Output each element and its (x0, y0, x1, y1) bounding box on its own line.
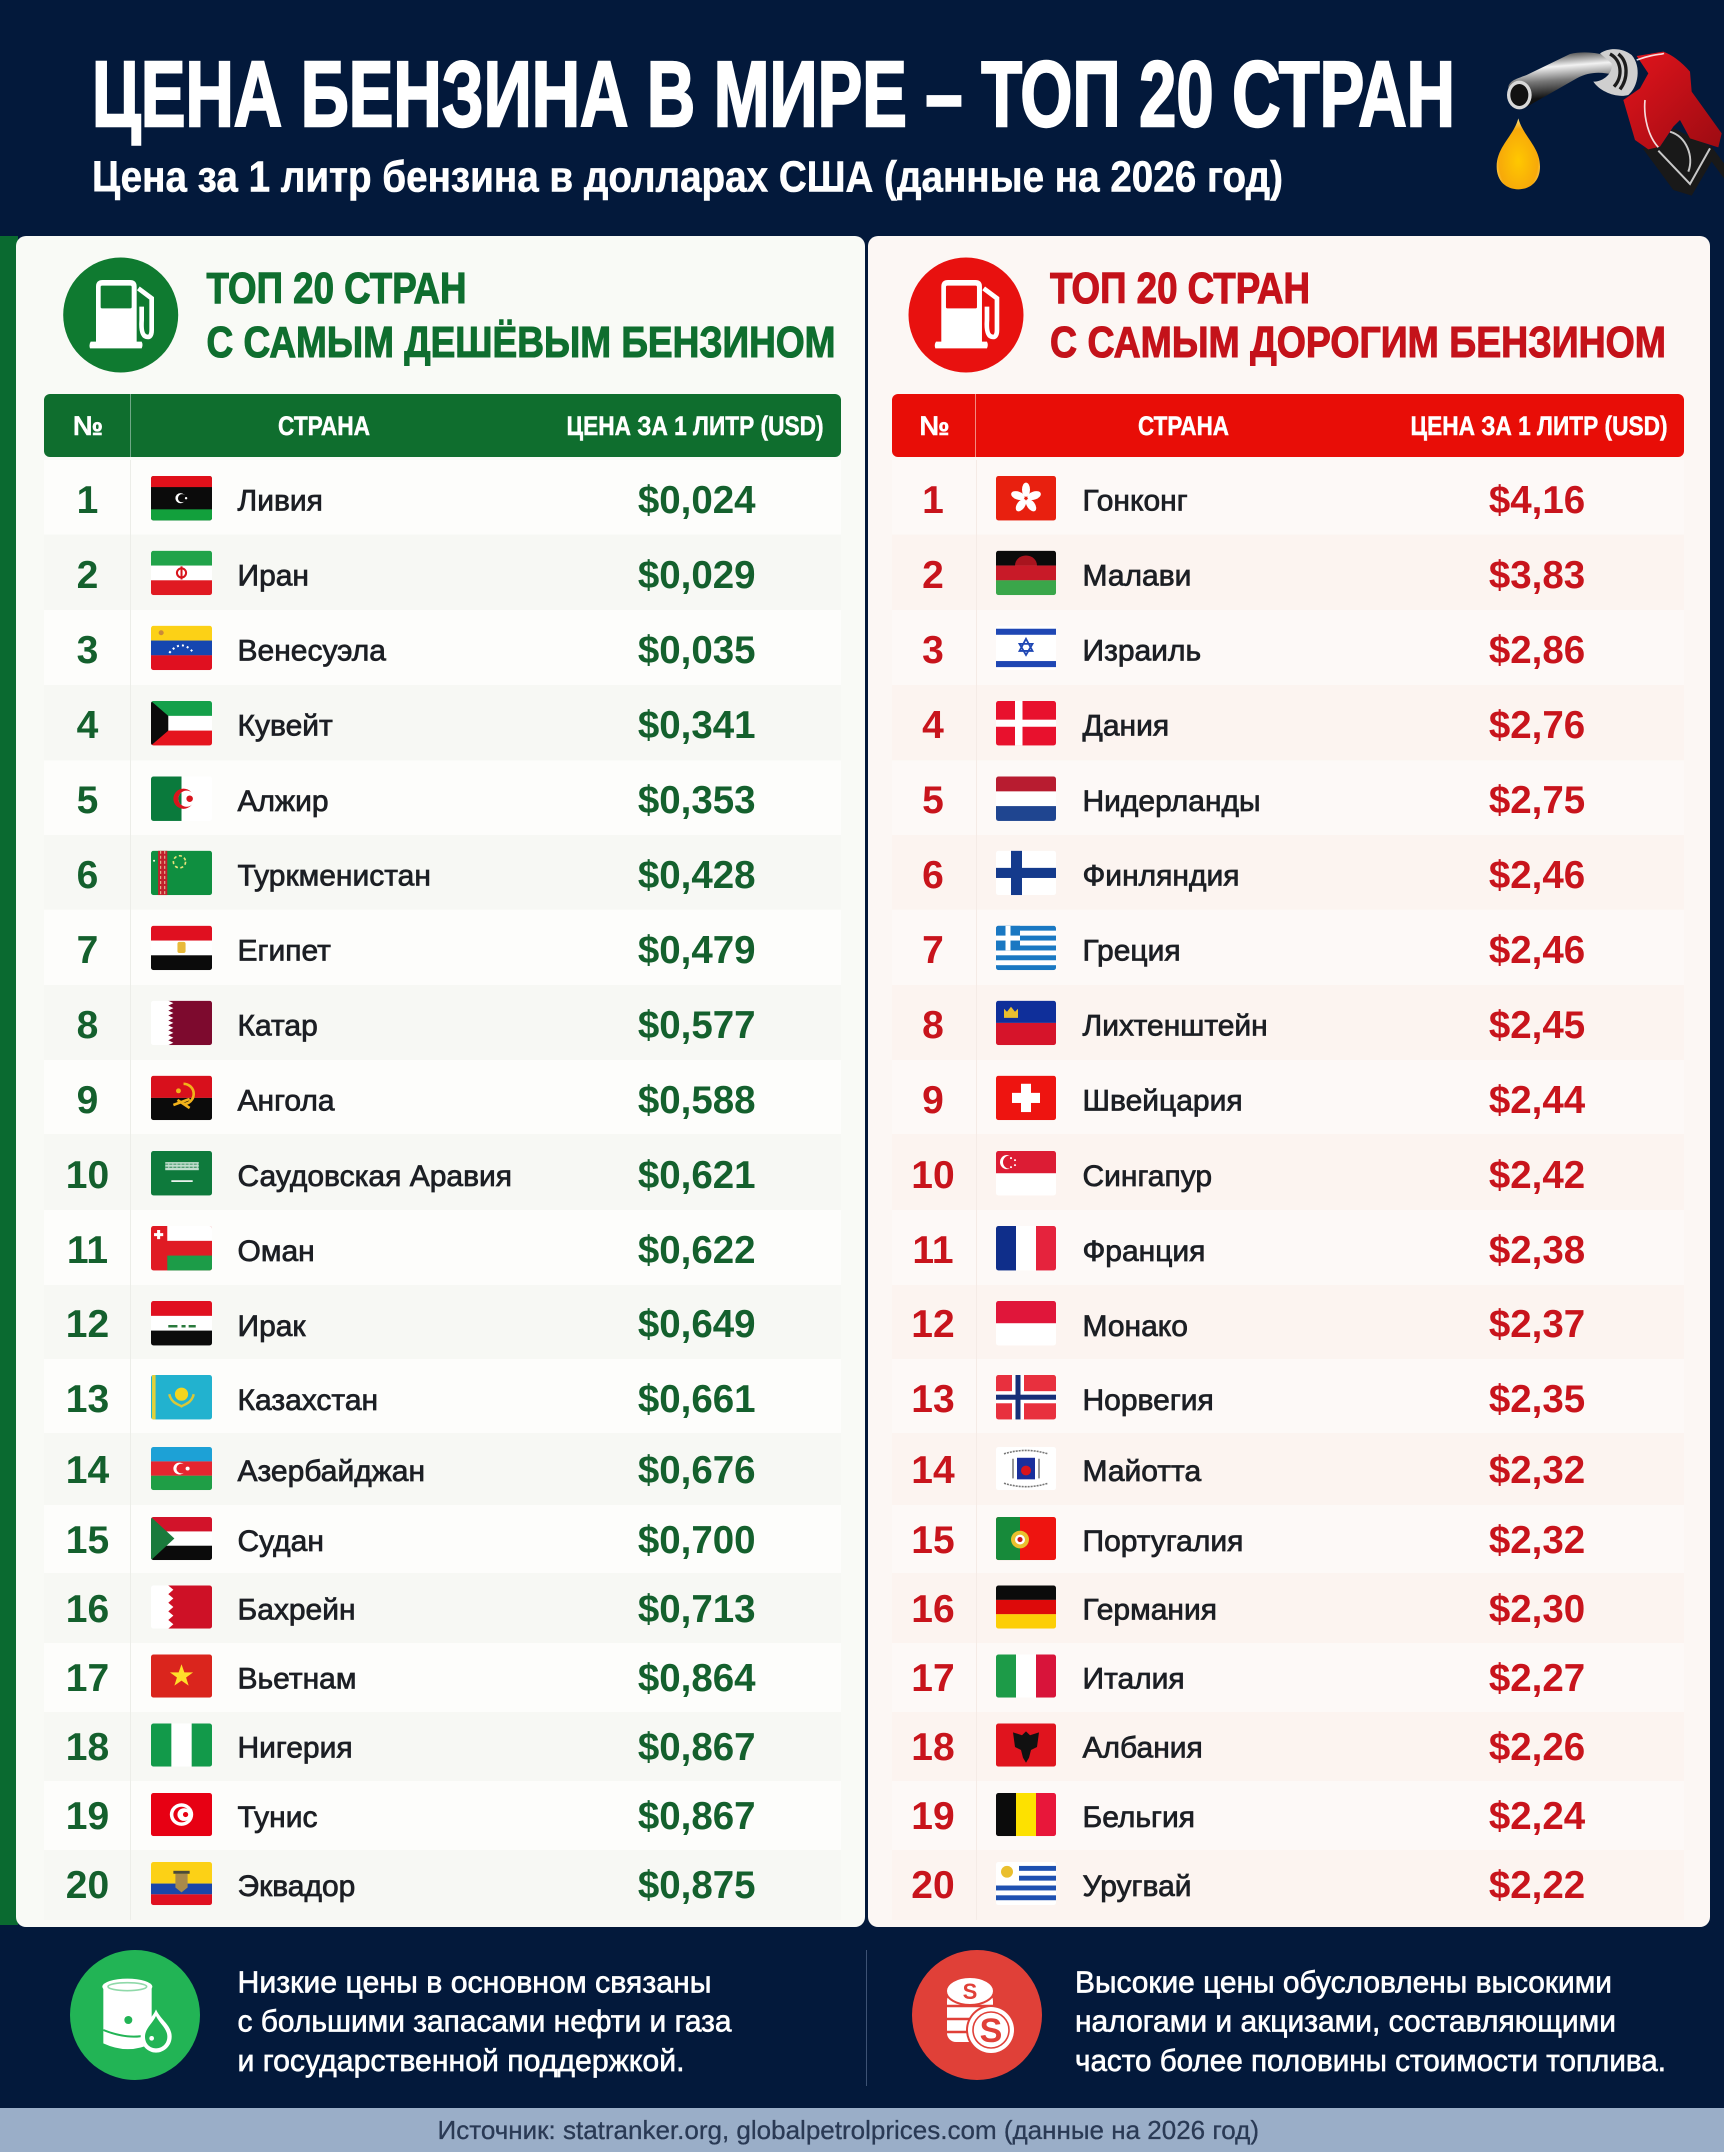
row 4: Дания (1082, 710, 1169, 742)
row 5: 5 (922, 779, 944, 822)
flag: Italy (996, 1654, 1056, 1698)
row 8: 8 (922, 1004, 944, 1047)
table header (892, 394, 1684, 457)
row 16: Германия (1082, 1594, 1217, 1626)
row 14: $0,676 (638, 1449, 756, 1492)
row 13: 13 (911, 1378, 955, 1421)
row 12 (68, 1301, 754, 1346)
flag: Uruguay (996, 1862, 1056, 1905)
note text: и государственной поддержкой. (238, 2043, 684, 2078)
row 5: 5 (77, 779, 98, 822)
row 16 (68, 1586, 754, 1629)
flag: Turkmenistan (151, 851, 212, 895)
row 18: $0,867 (638, 1726, 756, 1769)
row 16: $2,30 (1489, 1588, 1585, 1631)
flag: Iran (151, 551, 212, 595)
source bar (0, 2108, 1724, 2152)
row 20: 20 (911, 1864, 955, 1907)
flag: Germany (996, 1586, 1056, 1629)
icon: oil barrel (70, 1950, 200, 2080)
icon: green fuel pump (63, 258, 178, 372)
row 19: 19 (66, 1795, 109, 1838)
row 15 (892, 1505, 1684, 1573)
row 18: 18 (911, 1726, 955, 1769)
row 15: 15 (66, 1519, 109, 1562)
row 1: 1 (77, 479, 98, 522)
row 4 (77, 701, 754, 746)
flag: Iraq (151, 1301, 212, 1345)
row 14: Майотта (1082, 1455, 1201, 1488)
flag: Angola (151, 1076, 212, 1120)
row 14: 14 (66, 1449, 109, 1492)
row 3: Израиль (1082, 634, 1201, 668)
row 10 (68, 1151, 754, 1196)
flag: Finland (996, 851, 1056, 895)
flag: Nigeria (151, 1724, 212, 1767)
row 19: $2,24 (1489, 1795, 1586, 1838)
row 17: 17 (66, 1657, 109, 1700)
row 8: 8 (77, 1004, 98, 1047)
flag: Qatar (151, 1001, 212, 1045)
note text: Высокие цены обусловлены высокими (1075, 1964, 1612, 2000)
row 4: $2,76 (1489, 704, 1585, 747)
row 14 (68, 1447, 754, 1490)
row 6: 6 (922, 854, 944, 897)
row 12: 12 (66, 1303, 109, 1346)
row 16: 16 (66, 1588, 109, 1631)
row 17: Италия (1082, 1662, 1185, 1696)
flag: Vietnam (151, 1654, 212, 1698)
row 10: $0,621 (638, 1154, 756, 1197)
row 20: Эквадор (238, 1870, 355, 1903)
flag: Oman (151, 1226, 212, 1270)
flag: Tunisia (151, 1793, 212, 1836)
row 14: $2,32 (1489, 1449, 1585, 1492)
table header: № (73, 411, 103, 441)
row 4: $0,341 (638, 704, 756, 747)
row 7 (78, 926, 754, 970)
row 19: $0,867 (638, 1795, 756, 1838)
row 7: $0,479 (638, 929, 756, 972)
flag: Saudi Arabia (151, 1151, 212, 1195)
flag: Albania (996, 1724, 1056, 1767)
row 3 (78, 626, 754, 670)
row 4 (892, 685, 1684, 760)
row 3: 3 (922, 629, 944, 672)
row 12: $0,649 (638, 1303, 756, 1346)
row 1: Гонконг (1082, 484, 1188, 518)
row 12: Монако (1082, 1310, 1188, 1343)
row 3: Венесуэла (238, 634, 386, 668)
row 11: $2,38 (1489, 1229, 1585, 1272)
flag: Greece (996, 926, 1056, 970)
row 14 (892, 1433, 1684, 1505)
panel: cheapest petrol (0, 236, 865, 1927)
row 18 (68, 1724, 754, 1767)
row 9: $0,588 (638, 1079, 756, 1122)
row 8: $2,45 (1489, 1004, 1585, 1047)
flag: Belgium (996, 1793, 1056, 1836)
row 5: Алжир (238, 785, 329, 818)
row 11 (892, 1210, 1684, 1285)
panel heading: С САМЫМ ДЕШЁВЫМ БЕНЗИНОМ (206, 319, 836, 367)
row 15: Португалия (1082, 1525, 1243, 1558)
row 10: 10 (66, 1154, 109, 1197)
flag: Netherlands (996, 776, 1056, 821)
row 9: 9 (77, 1079, 98, 1122)
row 15: $0,700 (638, 1519, 756, 1562)
row 15: Судан (238, 1525, 324, 1558)
row 2: Иран (238, 560, 309, 592)
row 7: 7 (77, 929, 98, 972)
row 13: $2,35 (1489, 1378, 1585, 1421)
row 2: 2 (922, 554, 944, 597)
flag: Singapore (996, 1151, 1056, 1195)
flag: Egypt (151, 926, 212, 970)
row 16: Бахрейн (238, 1594, 356, 1626)
row 12: $2,37 (1489, 1303, 1585, 1346)
row 6: Туркменистан (238, 860, 431, 892)
icon: coins (912, 1950, 1042, 2080)
row 9: Ангола (238, 1084, 335, 1118)
panel heading (206, 265, 836, 367)
row 2: Малави (1082, 560, 1191, 592)
flag: Mayotte (996, 1447, 1056, 1490)
row 14: Азербайджан (238, 1455, 425, 1488)
row 10: 10 (911, 1154, 955, 1197)
row 5 (78, 776, 754, 821)
row 1: 1 (922, 479, 944, 522)
note text (238, 1964, 732, 2078)
row 8: $0,577 (638, 1004, 756, 1047)
row 1 (892, 460, 1684, 535)
row 17: $0,864 (638, 1657, 756, 1700)
row 13: $0,661 (638, 1378, 756, 1421)
row 15: $2,32 (1489, 1519, 1585, 1562)
flag: Switzerland (996, 1076, 1056, 1120)
flag: Libya (151, 476, 212, 520)
row 20: Уругвай (1082, 1870, 1192, 1903)
row 4: 4 (77, 704, 99, 747)
row 11: Франция (1082, 1235, 1205, 1268)
row 11: 11 (912, 1229, 954, 1272)
row 3 (892, 610, 1684, 685)
row 1: $0,024 (638, 479, 756, 522)
flag: Denmark (996, 701, 1056, 745)
row 18: 18 (66, 1726, 109, 1769)
flag: Israel (996, 626, 1056, 670)
row 20: $0,875 (638, 1864, 756, 1907)
row 7: $2,46 (1489, 929, 1585, 972)
flag: Azerbaijan (151, 1447, 212, 1490)
row 6: Финляндия (1082, 860, 1239, 892)
row 19 (892, 1781, 1684, 1850)
flag: Bahrain (151, 1586, 212, 1629)
row 20 (892, 1850, 1684, 1920)
row 2: $0,029 (638, 554, 756, 597)
row 10 (892, 1134, 1684, 1210)
subtitle: Цена за 1 литр бензина в долларах США (данные на 2026 год) (92, 152, 1283, 202)
panel heading: ТОП 20 СТРАН (206, 265, 466, 313)
row 12: 12 (911, 1303, 955, 1346)
panel: most expensive petrol (868, 236, 1710, 1927)
row 2: 2 (77, 554, 98, 597)
row 7: Греция (1082, 934, 1181, 968)
source bar: Источник: statranker.org, globalpetrolprices.com (данные на 2026 год) (438, 2115, 1259, 2145)
row 8 (78, 1000, 754, 1046)
row 11 (69, 1226, 754, 1270)
row 8 (892, 985, 1684, 1060)
panel heading (1050, 265, 1666, 367)
flag: Kazakhstan (151, 1375, 212, 1419)
flag: France (996, 1226, 1056, 1270)
row 5: $0,353 (638, 779, 756, 822)
row 6: 6 (77, 854, 98, 897)
row 20: $2,22 (1489, 1864, 1585, 1907)
row 9: 9 (922, 1079, 944, 1122)
row 9: $2,44 (1489, 1079, 1586, 1122)
row 2: $3,83 (1489, 554, 1585, 597)
table header (44, 394, 841, 457)
row 17: $2,27 (1489, 1657, 1585, 1700)
row 7: 7 (922, 929, 944, 972)
row 2 (892, 535, 1684, 610)
row 17 (892, 1643, 1684, 1712)
row 13 (892, 1359, 1684, 1433)
row 8: Катар (238, 1010, 318, 1042)
row 10: $2,42 (1489, 1154, 1585, 1197)
flag: Algeria (151, 776, 193, 821)
row 18 (892, 1712, 1684, 1781)
row 6 (892, 835, 1684, 910)
row 3: $0,035 (638, 629, 756, 672)
note text: налогами и акцизами, составляющими (1075, 2004, 1616, 2038)
row 3: 3 (77, 629, 98, 672)
row 17: 17 (911, 1657, 955, 1700)
row 4: Кувейт (238, 710, 333, 742)
row 5 (892, 760, 1684, 835)
row 8: Лихтенштейн (1082, 1010, 1268, 1042)
flag: Venezuela (151, 626, 212, 670)
flag: Malawi (996, 551, 1056, 595)
row 7: Египет (238, 934, 331, 968)
row 4: 4 (922, 704, 944, 747)
row 19: Тунис (238, 1801, 317, 1834)
note text: с большими запасами нефти и газа (238, 2004, 732, 2038)
row 9: Швейцария (1082, 1084, 1243, 1118)
row 10: Сингапур (1082, 1160, 1212, 1193)
row 19: Бельгия (1082, 1801, 1195, 1834)
note text (1075, 1964, 1666, 2078)
row 12: Ирак (238, 1310, 306, 1343)
row 17 (68, 1654, 756, 1698)
row 11: 11 (67, 1229, 108, 1272)
row 1 (79, 476, 756, 520)
icon: coins: S (963, 1979, 977, 2004)
flag: Liechtenstein (996, 1001, 1056, 1045)
note text: Низкие цены в основном связаны (238, 1964, 712, 2000)
row 18: Албания (1082, 1732, 1203, 1764)
row 7 (892, 910, 1684, 985)
row 13: Норвегия (1082, 1384, 1214, 1417)
row 9 (892, 1060, 1684, 1134)
table header: ЦЕНА ЗА 1 ЛИТР (USD) (566, 411, 824, 441)
row 19: 19 (911, 1795, 955, 1838)
icon: red fuel pump (908, 258, 1024, 372)
row 6: $2,46 (1489, 854, 1585, 897)
row 11: $0,622 (638, 1229, 756, 1272)
table header: № (919, 411, 950, 441)
table header: ЦЕНА ЗА 1 ЛИТР (USD) (1410, 411, 1668, 441)
row 16: $0,713 (638, 1588, 756, 1631)
icon: fuel nozzle with drop (1497, 49, 1724, 196)
flag: Hong Kong (996, 476, 1056, 520)
row 15 (68, 1517, 754, 1560)
panel heading: ТОП 20 СТРАН (1050, 265, 1310, 313)
row 13 (68, 1375, 754, 1420)
row 5: $2,75 (1489, 779, 1585, 822)
row 6 (78, 850, 754, 896)
row 10: Саудовская Аравия (238, 1160, 512, 1193)
flag: Norway (996, 1375, 1056, 1419)
row 12 (892, 1285, 1684, 1359)
row 3: $2,86 (1489, 629, 1585, 672)
flag: Portugal (996, 1517, 1056, 1560)
row 18: $2,26 (1489, 1726, 1585, 1769)
row 18: Нигерия (238, 1732, 353, 1764)
row 19 (68, 1793, 754, 1836)
icon: coins: S (980, 2012, 1002, 2050)
row 2 (78, 550, 754, 596)
table header: СТРАНА (1138, 411, 1229, 441)
row 16: 16 (911, 1588, 955, 1631)
footer note: high prices (912, 1950, 1666, 2080)
row 13: Казахстан (238, 1384, 378, 1417)
table header: СТРАНА (278, 411, 370, 441)
row 20 (67, 1862, 754, 1906)
row 15: 15 (911, 1519, 955, 1562)
row 9 (78, 1076, 754, 1120)
row 5: Нидерланды (1082, 785, 1261, 818)
flag: Ecuador (151, 1862, 212, 1905)
footer note: low prices (70, 1950, 732, 2080)
row 6: $0,428 (638, 854, 756, 897)
row 20: 20 (66, 1864, 109, 1907)
row 17: Вьетнам (238, 1662, 356, 1696)
flag: Monaco (996, 1301, 1056, 1345)
row 14: 14 (911, 1449, 955, 1492)
row 1: Ливия (238, 484, 323, 518)
row 16 (892, 1573, 1684, 1643)
flag: Kuwait (151, 701, 212, 745)
row 13: 13 (66, 1378, 109, 1421)
row 1: $4,16 (1489, 479, 1585, 522)
note text: часто более половины стоимости топлива. (1075, 2043, 1666, 2078)
flag: Sudan (151, 1517, 212, 1560)
row 11: Оман (238, 1235, 315, 1268)
